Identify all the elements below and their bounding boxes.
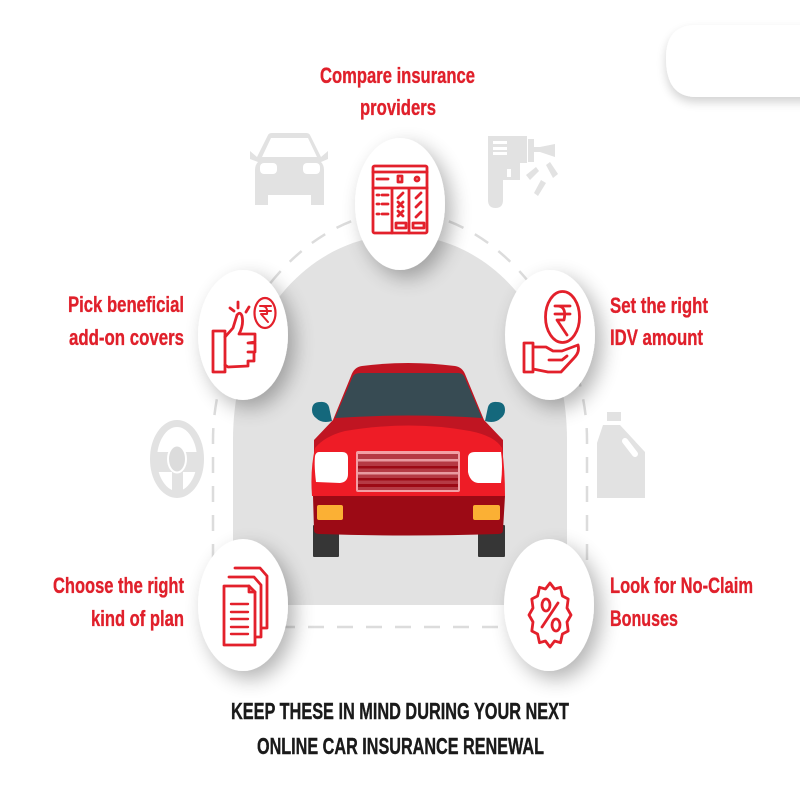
fog lamps <box>317 505 500 520</box>
icon: comparison table <box>373 166 427 233</box>
label: compare: Compare insurance <box>320 63 475 88</box>
icon: percent badge <box>529 583 571 647</box>
grey arch backdrop <box>233 235 567 605</box>
dashed ring <box>213 212 587 627</box>
icon: grey bottle <box>597 412 645 498</box>
panel: choose plan <box>198 539 288 671</box>
icon: grey spray gun <box>488 136 558 208</box>
label: add-on covers <box>68 292 184 350</box>
panel: compare insurance providers <box>355 138 445 270</box>
windscreen <box>335 373 482 418</box>
icon: thumbs up with rupee <box>213 298 276 372</box>
panel: pick add-ons <box>198 270 288 400</box>
label: plan <box>53 573 185 631</box>
roof and upper body <box>314 363 503 460</box>
label: plan: kind of plan <box>91 606 184 631</box>
label: no-claim: Bonuses <box>610 606 678 631</box>
mirrors <box>312 402 505 422</box>
label: plan: Choose the right <box>53 573 185 598</box>
label: add-on covers: add-on covers <box>69 325 184 350</box>
red car <box>311 363 505 557</box>
label: compare <box>320 63 475 120</box>
label: IDV: Set the right <box>610 293 709 318</box>
tyres <box>313 525 505 557</box>
label: no-claim: Look for No-Claim <box>610 573 753 598</box>
headlights <box>315 452 502 483</box>
icon: hand holding rupee <box>524 292 580 372</box>
panel: set IDV <box>505 270 595 400</box>
icon: documents stack <box>224 568 267 645</box>
hood and body <box>311 426 505 496</box>
bumper <box>313 496 505 536</box>
title: ONLINE CAR INSURANCE RENEWAL <box>257 733 544 759</box>
icon: grey car <box>250 133 328 205</box>
label: compare: providers <box>360 95 436 120</box>
label: IDV <box>610 293 709 350</box>
icon: grey steering wheel <box>152 424 202 494</box>
title: KEEP THESE IN MIND DURING YOUR NEXT <box>231 698 569 724</box>
title <box>231 698 569 759</box>
panel: no-claim bonuses <box>504 539 594 671</box>
label: no-claim <box>610 573 753 631</box>
label: add-on covers: Pick beneficial <box>68 292 184 317</box>
label: IDV: IDV amount <box>610 325 704 350</box>
top right blank tab <box>666 25 800 97</box>
grille <box>356 451 460 492</box>
